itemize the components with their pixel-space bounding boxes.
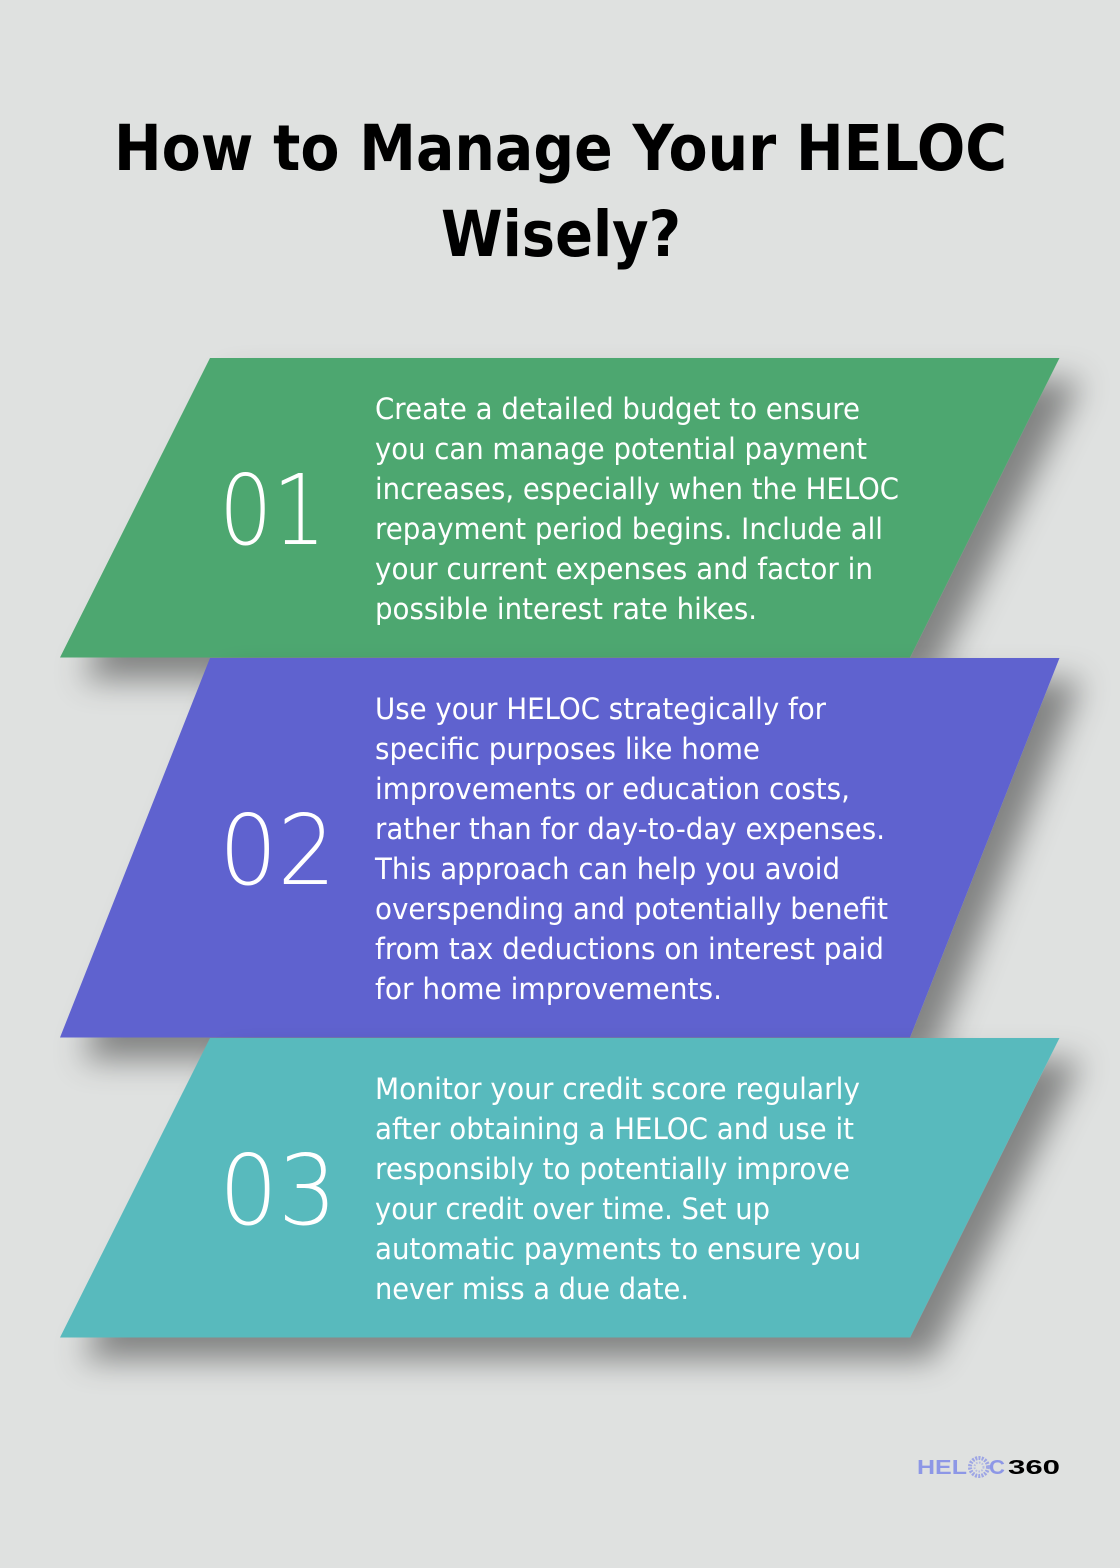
step 03 text: responsibly to potentially improve [375, 1152, 850, 1186]
step 02 text: specific purposes like home [375, 732, 760, 766]
teal parallelogram [60, 1038, 1060, 1338]
step 01 text: increases, especially when the HELOC [375, 472, 899, 506]
step 02 text: from tax deductions on interest paid [375, 932, 884, 966]
step 03 text: never miss a due date. [375, 1272, 689, 1306]
step 01 text: Create a detailed budget to ensure [375, 392, 860, 426]
step 03 text: Monitor your credit score regularly [375, 1072, 860, 1106]
panel: step 03 [60, 1038, 1060, 1338]
step 03 text: after obtaining a HELOC and use it [375, 1112, 854, 1146]
step 01 text: you can manage potential payment [375, 432, 867, 466]
step 02 text: improvements or education costs, [375, 772, 850, 806]
number 02: 02 [219, 794, 336, 907]
step 01 text: your current expenses and factor in [375, 552, 873, 586]
title: Wisely? [441, 198, 681, 271]
green parallelogram [60, 358, 1060, 658]
step 01 text: repayment period begins. Include all [375, 512, 883, 546]
logo: HELOC360: 360 [1008, 1457, 1060, 1479]
title [114, 112, 1007, 271]
step 02 text: Use your HELOC strategically for [375, 692, 826, 726]
step 02 text [374, 692, 888, 1006]
step 02 text: overspending and potentially benefit [375, 892, 888, 926]
step 03 text: your credit over time. Set up [375, 1192, 770, 1226]
panel: step 02 [60, 658, 1060, 1038]
step 03 text: automatic payments to ensure you [375, 1232, 861, 1266]
blue parallelogram [60, 658, 1060, 1038]
icon: logo swirl [970, 1458, 988, 1476]
step 02 text: This approach can help you avoid [374, 852, 840, 886]
step 02 text: rather than for day-to-day expenses. [375, 812, 885, 846]
logo: HELOC360 [917, 1457, 1060, 1479]
logo: HELOC360: C [989, 1457, 1005, 1479]
logo: HELOC360: HEL [917, 1457, 967, 1479]
number 03: 03 [219, 1134, 337, 1247]
step 03 text [375, 1072, 861, 1306]
number 01: 01 [219, 454, 326, 567]
panel: step 01 [60, 358, 1060, 658]
step 02 text: for home improvements. [375, 972, 722, 1006]
title: How to Manage Your HELOC [114, 112, 1007, 185]
step 01 text: possible interest rate hikes. [375, 592, 757, 626]
step 01 text [375, 392, 899, 626]
